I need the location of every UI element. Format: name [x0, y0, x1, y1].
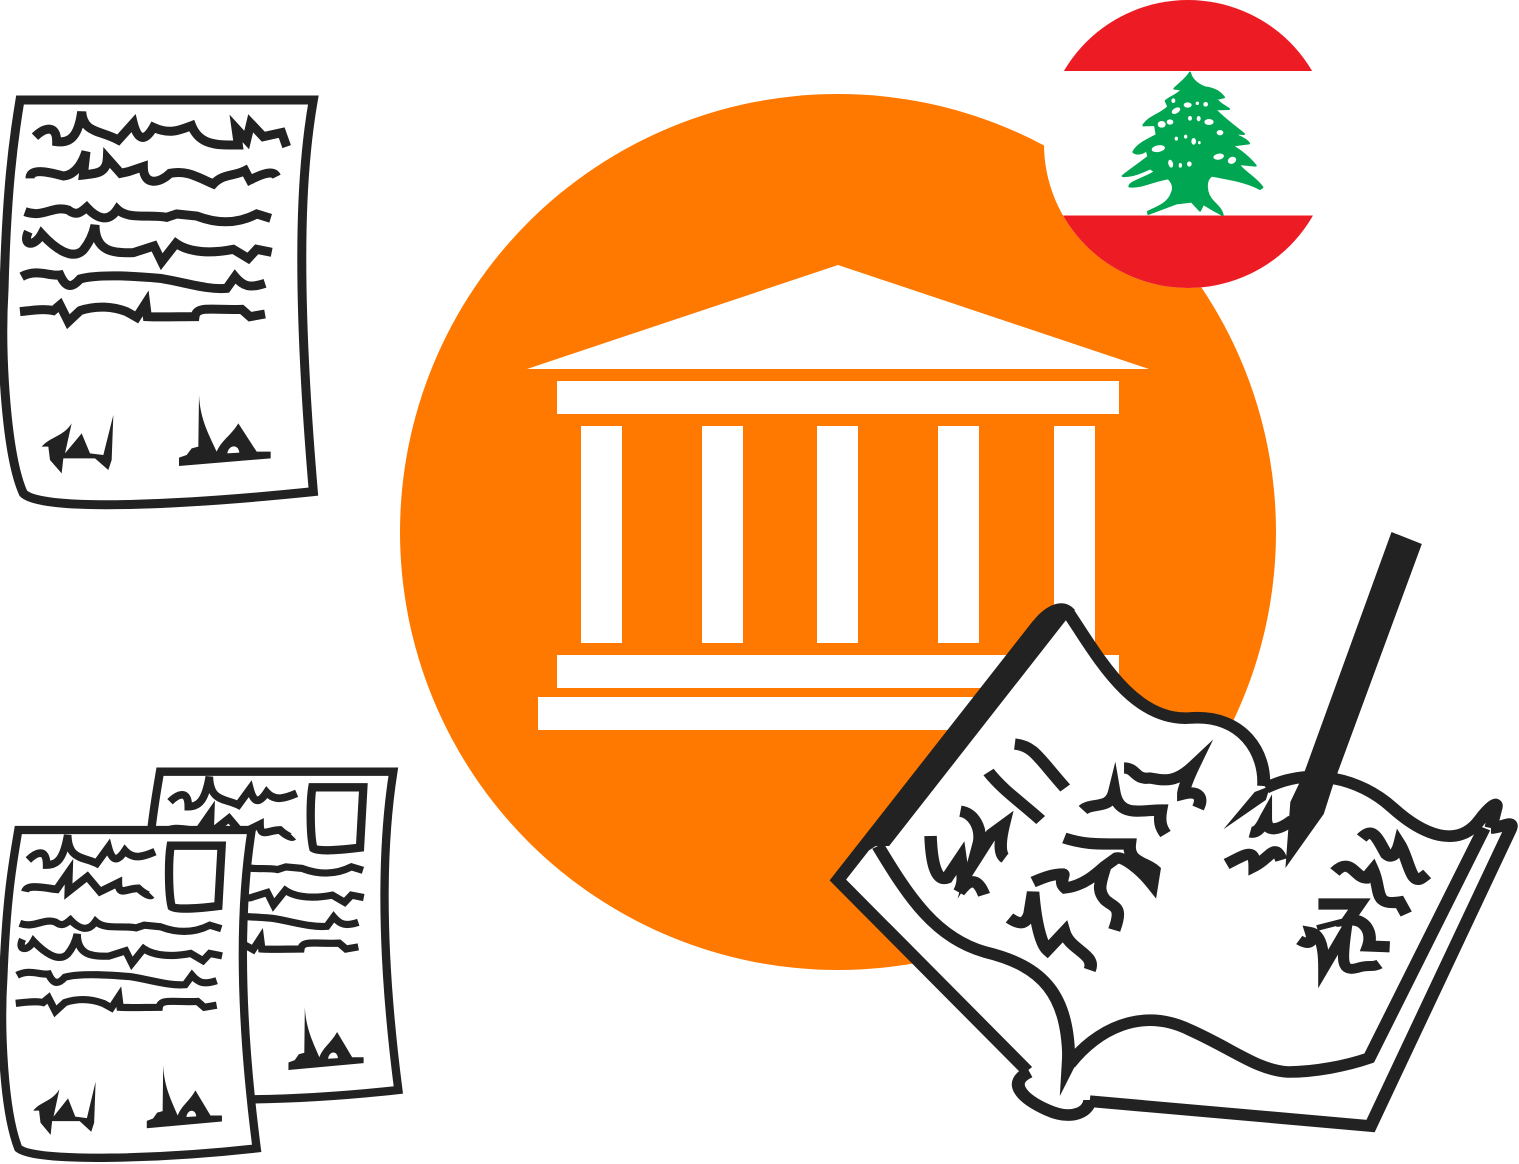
- upper base step: [557, 655, 1119, 688]
- spine band: [851, 603, 1075, 862]
- entablature: [557, 381, 1119, 414]
- icon: single signed document: [3, 100, 313, 505]
- right page: [1223, 786, 1270, 829]
- icon: Lebanese flag: [1044, 0, 1332, 288]
- book silhouette: [838, 607, 1512, 1126]
- pen: [1285, 532, 1422, 868]
- document sheet: [3, 100, 313, 505]
- icon: front form document: [2, 830, 257, 1158]
- lower base step: [538, 697, 1138, 730]
- columns: [581, 426, 1095, 643]
- cedar tree: [1123, 73, 1262, 215]
- icon: rear form document: [144, 772, 398, 1099]
- flag white field: [1044, 0, 1332, 288]
- book cover: [838, 624, 1038, 1071]
- icon: open book with pen: [838, 532, 1512, 1126]
- handwriting on right page: [1227, 818, 1427, 969]
- handwriting on left page: [931, 744, 1200, 970]
- flag red stripes: [1063, 0, 1313, 288]
- document text lines: [20, 112, 287, 322]
- orange circle background: [400, 94, 1276, 970]
- back cover: [1090, 824, 1511, 1126]
- icon: parliament building: [527, 265, 1149, 730]
- document signatures: [42, 395, 271, 473]
- roof: [527, 265, 1149, 369]
- left page: [1068, 612, 1264, 786]
